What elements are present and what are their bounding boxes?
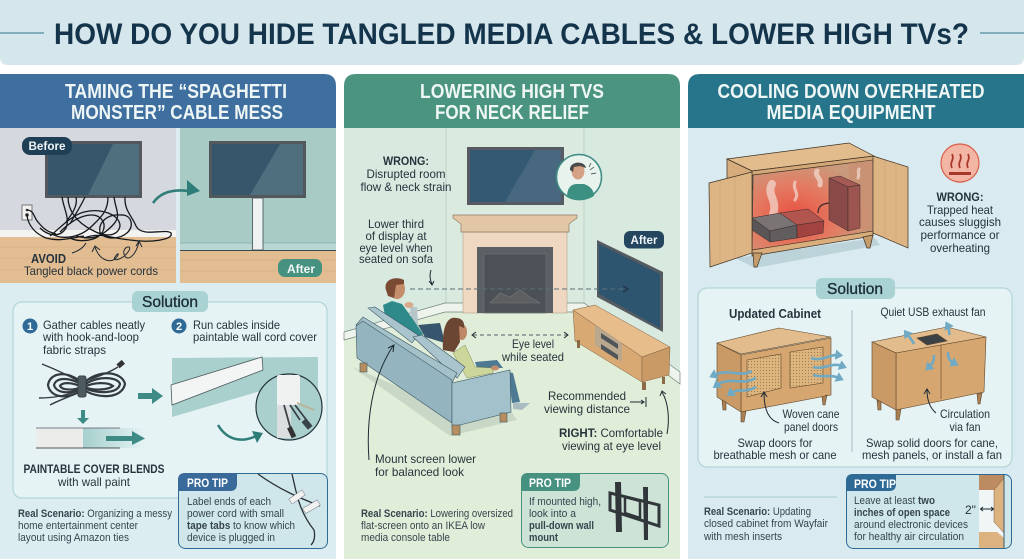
wrong note: heat (919, 190, 1001, 255)
panel heading: cables (0, 74, 336, 128)
real scenario: cooling (703, 497, 837, 543)
cane cabinet (717, 328, 831, 422)
caption: paintable cover (24, 462, 164, 489)
pro tip: mount (521, 473, 668, 548)
swap solid doors caption: mesh panels, or install a fan (862, 448, 1002, 462)
real scenario: cables: home entertainment center (18, 520, 138, 532)
avoid note: Tangled black power cords (24, 264, 158, 278)
eye level while seated note: Eye level (512, 337, 554, 351)
solution tag: cooling: Solution (827, 281, 883, 298)
wrong note: heat: causes sluggish (919, 215, 1001, 229)
icon: cable bundle (39, 360, 125, 405)
step 2 (172, 318, 317, 344)
arrow: curved to detail (218, 425, 263, 443)
wrong note: TV: Disrupted room (366, 167, 446, 181)
step 1: Gather cables neatly (43, 318, 145, 332)
high TV (467, 147, 564, 205)
step 1 (22, 318, 145, 357)
icon: outlet (22, 205, 32, 220)
solution box: cables (13, 291, 328, 548)
swap solid doors caption: Swap solid doors for cane, (866, 436, 998, 450)
pro tip: airflow: PRO TIP (854, 477, 896, 491)
step 2: 2 (176, 321, 182, 333)
panel heading: cables: MONSTER” CABLE MESS (71, 102, 283, 124)
pro tip: mount: If mounted high, (529, 496, 601, 508)
viewers on sofa (352, 278, 530, 436)
circulation note: via fan (950, 420, 980, 434)
pro tip: mount: pull-down wall (529, 520, 594, 532)
solution tag: Solution (142, 294, 198, 311)
airflow arrows: cane (714, 355, 842, 393)
overheated cabinet (709, 143, 908, 268)
real scenario: cooling: with mesh inserts (703, 531, 782, 543)
title band (0, 0, 1024, 65)
before TV (45, 141, 142, 198)
clearance diagram (965, 475, 1004, 548)
panel heading: TVs: FOR NECK RELIEF (435, 102, 589, 124)
arrow: before to after (153, 180, 200, 203)
pro tip: labels (178, 473, 328, 548)
panel: lowering high TVs (344, 74, 680, 559)
pro tip: mount: look into a (529, 508, 577, 520)
wrong note: heat: WRONG: (936, 190, 984, 204)
real scenario: cables: Real Scenario: Organizing a messy (18, 508, 172, 520)
mount screen note: for balanced look (375, 465, 465, 479)
title: HOW DO YOU HIDE TANGLED MEDIA CABLES & LOWER HIGH TVs? (54, 18, 969, 51)
panel heading: cooling (688, 74, 1024, 128)
solution box: cooling (698, 278, 1012, 467)
sofa (356, 307, 511, 435)
mount screen note (368, 345, 476, 479)
step 1: 1 (27, 321, 33, 333)
pro tip: airflow: inches of open space (854, 507, 950, 519)
airflow arrows: fan (907, 326, 954, 367)
illustration: wall cord cover (171, 357, 318, 417)
before scene (0, 128, 176, 283)
before tag: Before (28, 139, 66, 153)
angled after TV (597, 240, 663, 332)
real scenario: TVs: Real Scenario: Lowering oversized (361, 508, 513, 520)
wrong note: TV: flow & neck strain (360, 180, 452, 194)
panel: taming cable mess (0, 74, 336, 559)
pro tip: airflow: Leave at least two (854, 495, 935, 507)
detail circle: cables in cover (256, 374, 322, 440)
clearance diagram: 2" (965, 503, 976, 517)
dashed sightline (410, 286, 628, 292)
caption: paintable cover: PAINTABLE COVER BLENDS (24, 462, 164, 476)
device: console (752, 203, 829, 242)
panel heading: cooling: COOLING DOWN OVERHEATED (718, 81, 984, 103)
before tag (22, 137, 72, 155)
circulation note (924, 389, 990, 434)
wrong note: TV (360, 154, 452, 194)
icon: wall mount (610, 482, 659, 540)
pro tip: labels: device is plugged in (187, 532, 275, 544)
arrow: down (77, 410, 89, 424)
viewing distance note (544, 389, 646, 416)
eye level note: eye level when (360, 241, 432, 255)
panel heading: cooling: MEDIA EQUIPMENT (766, 102, 936, 124)
real scenario: cooling: closed cabinet from Wayfair (704, 518, 828, 530)
paintable cover bar (36, 428, 145, 448)
cord cover (252, 198, 263, 250)
panel heading: TVs: LOWERING HIGH TVS (420, 81, 604, 103)
swap doors caption (714, 436, 837, 462)
circulation note: Circulation (940, 407, 990, 421)
room corners and floor (344, 128, 680, 559)
caption: paintable cover: with wall paint (57, 475, 131, 489)
right note: viewing at eye level (562, 439, 661, 453)
fireplace (453, 215, 577, 313)
real scenario: TVs (361, 508, 513, 544)
right note (559, 391, 668, 453)
mount screen note: Mount screen lower (375, 452, 476, 466)
tangled cables (27, 197, 171, 241)
eye level note: Lower third (368, 217, 424, 231)
real scenario: TVs: media console table (361, 532, 450, 544)
fan cabinet (872, 327, 986, 420)
solution tag (132, 291, 208, 312)
step 1: with hook-and-loop (42, 330, 139, 344)
real scenario: cooling: Real Scenario: Updating (704, 506, 811, 518)
pro tip: mount: mount (529, 532, 558, 544)
wrong note: heat: Trapped heat (927, 203, 994, 217)
swap doors caption: Swap doors for (738, 436, 812, 450)
man (383, 278, 445, 343)
step 2: Run cables inside (193, 318, 280, 332)
wrong note: TV: WRONG: (383, 154, 429, 168)
updated cabinet label: Updated Cabinet (729, 306, 822, 321)
after tag: TV: After (630, 233, 658, 247)
panel: cooling media equipment (688, 74, 1024, 559)
steam (770, 169, 859, 214)
arrow: bundle to cover (138, 388, 163, 404)
real scenario: cables: layout using Amazon ties (18, 532, 129, 544)
avoid note: AVOID (31, 252, 66, 266)
woman (443, 318, 530, 410)
eye level note (359, 217, 434, 285)
swap solid doors caption (862, 436, 1002, 462)
fan note: Quiet USB exhaust fan (880, 305, 986, 319)
real scenario: TVs: flat-screen onto an IKEA low (361, 520, 485, 532)
panel heading: TVs (344, 74, 680, 128)
pro tip: labels: Label ends of each (187, 496, 271, 508)
icon: heat warning (941, 144, 979, 182)
right note: RIGHT: Comfortable (559, 426, 663, 440)
media console (573, 305, 670, 390)
pro tip: labels: PRO TIP (187, 476, 228, 490)
after tag: After (287, 262, 315, 276)
pro tip: airflow: for healthy air circulation (854, 531, 964, 543)
pro tip: airflow (846, 474, 1012, 548)
solution tag: cooling (816, 278, 895, 299)
woven cane note: panel doors (784, 420, 838, 434)
after scene (180, 128, 336, 283)
panel heading: cables: TAMING THE “SPAGHETTI (65, 81, 287, 103)
after tag: TV (624, 231, 664, 248)
icon: neck strain person (556, 154, 602, 200)
cables with tape tabs (258, 474, 320, 545)
device: tower (829, 176, 860, 231)
wrong note: heat: overheating (930, 241, 990, 255)
real scenario: cables (18, 508, 172, 544)
avoid note (24, 252, 158, 278)
icon: fan (917, 334, 947, 345)
pro tip: mount: PRO TIP (529, 476, 571, 490)
after TV (209, 141, 306, 198)
pro tip: labels: tape tabs to know which (187, 520, 295, 532)
woven cane note: Woven cane (782, 407, 840, 421)
after tag (278, 259, 322, 277)
viewing distance note: viewing distance (544, 402, 630, 416)
eye level note: of display at (366, 229, 427, 243)
eye level note: seated on sofa (359, 252, 433, 266)
eye level while seated note: while seated (501, 350, 564, 364)
pro tip: airflow: around electronic devices (854, 519, 968, 531)
eye level while seated note (472, 332, 568, 364)
swap doors caption: breathable mesh or cane (714, 448, 837, 462)
icon: curly arrows (72, 241, 142, 261)
viewing distance note: Recommended (548, 389, 626, 403)
step 1: fabric straps (43, 343, 106, 357)
wrong note: heat: performance or (920, 228, 1000, 242)
sofa shadow (352, 367, 517, 436)
step 2: paintable wall cord cover (193, 330, 317, 344)
pro tip: labels: power cord with small (187, 508, 284, 520)
woven cane note (761, 392, 840, 434)
